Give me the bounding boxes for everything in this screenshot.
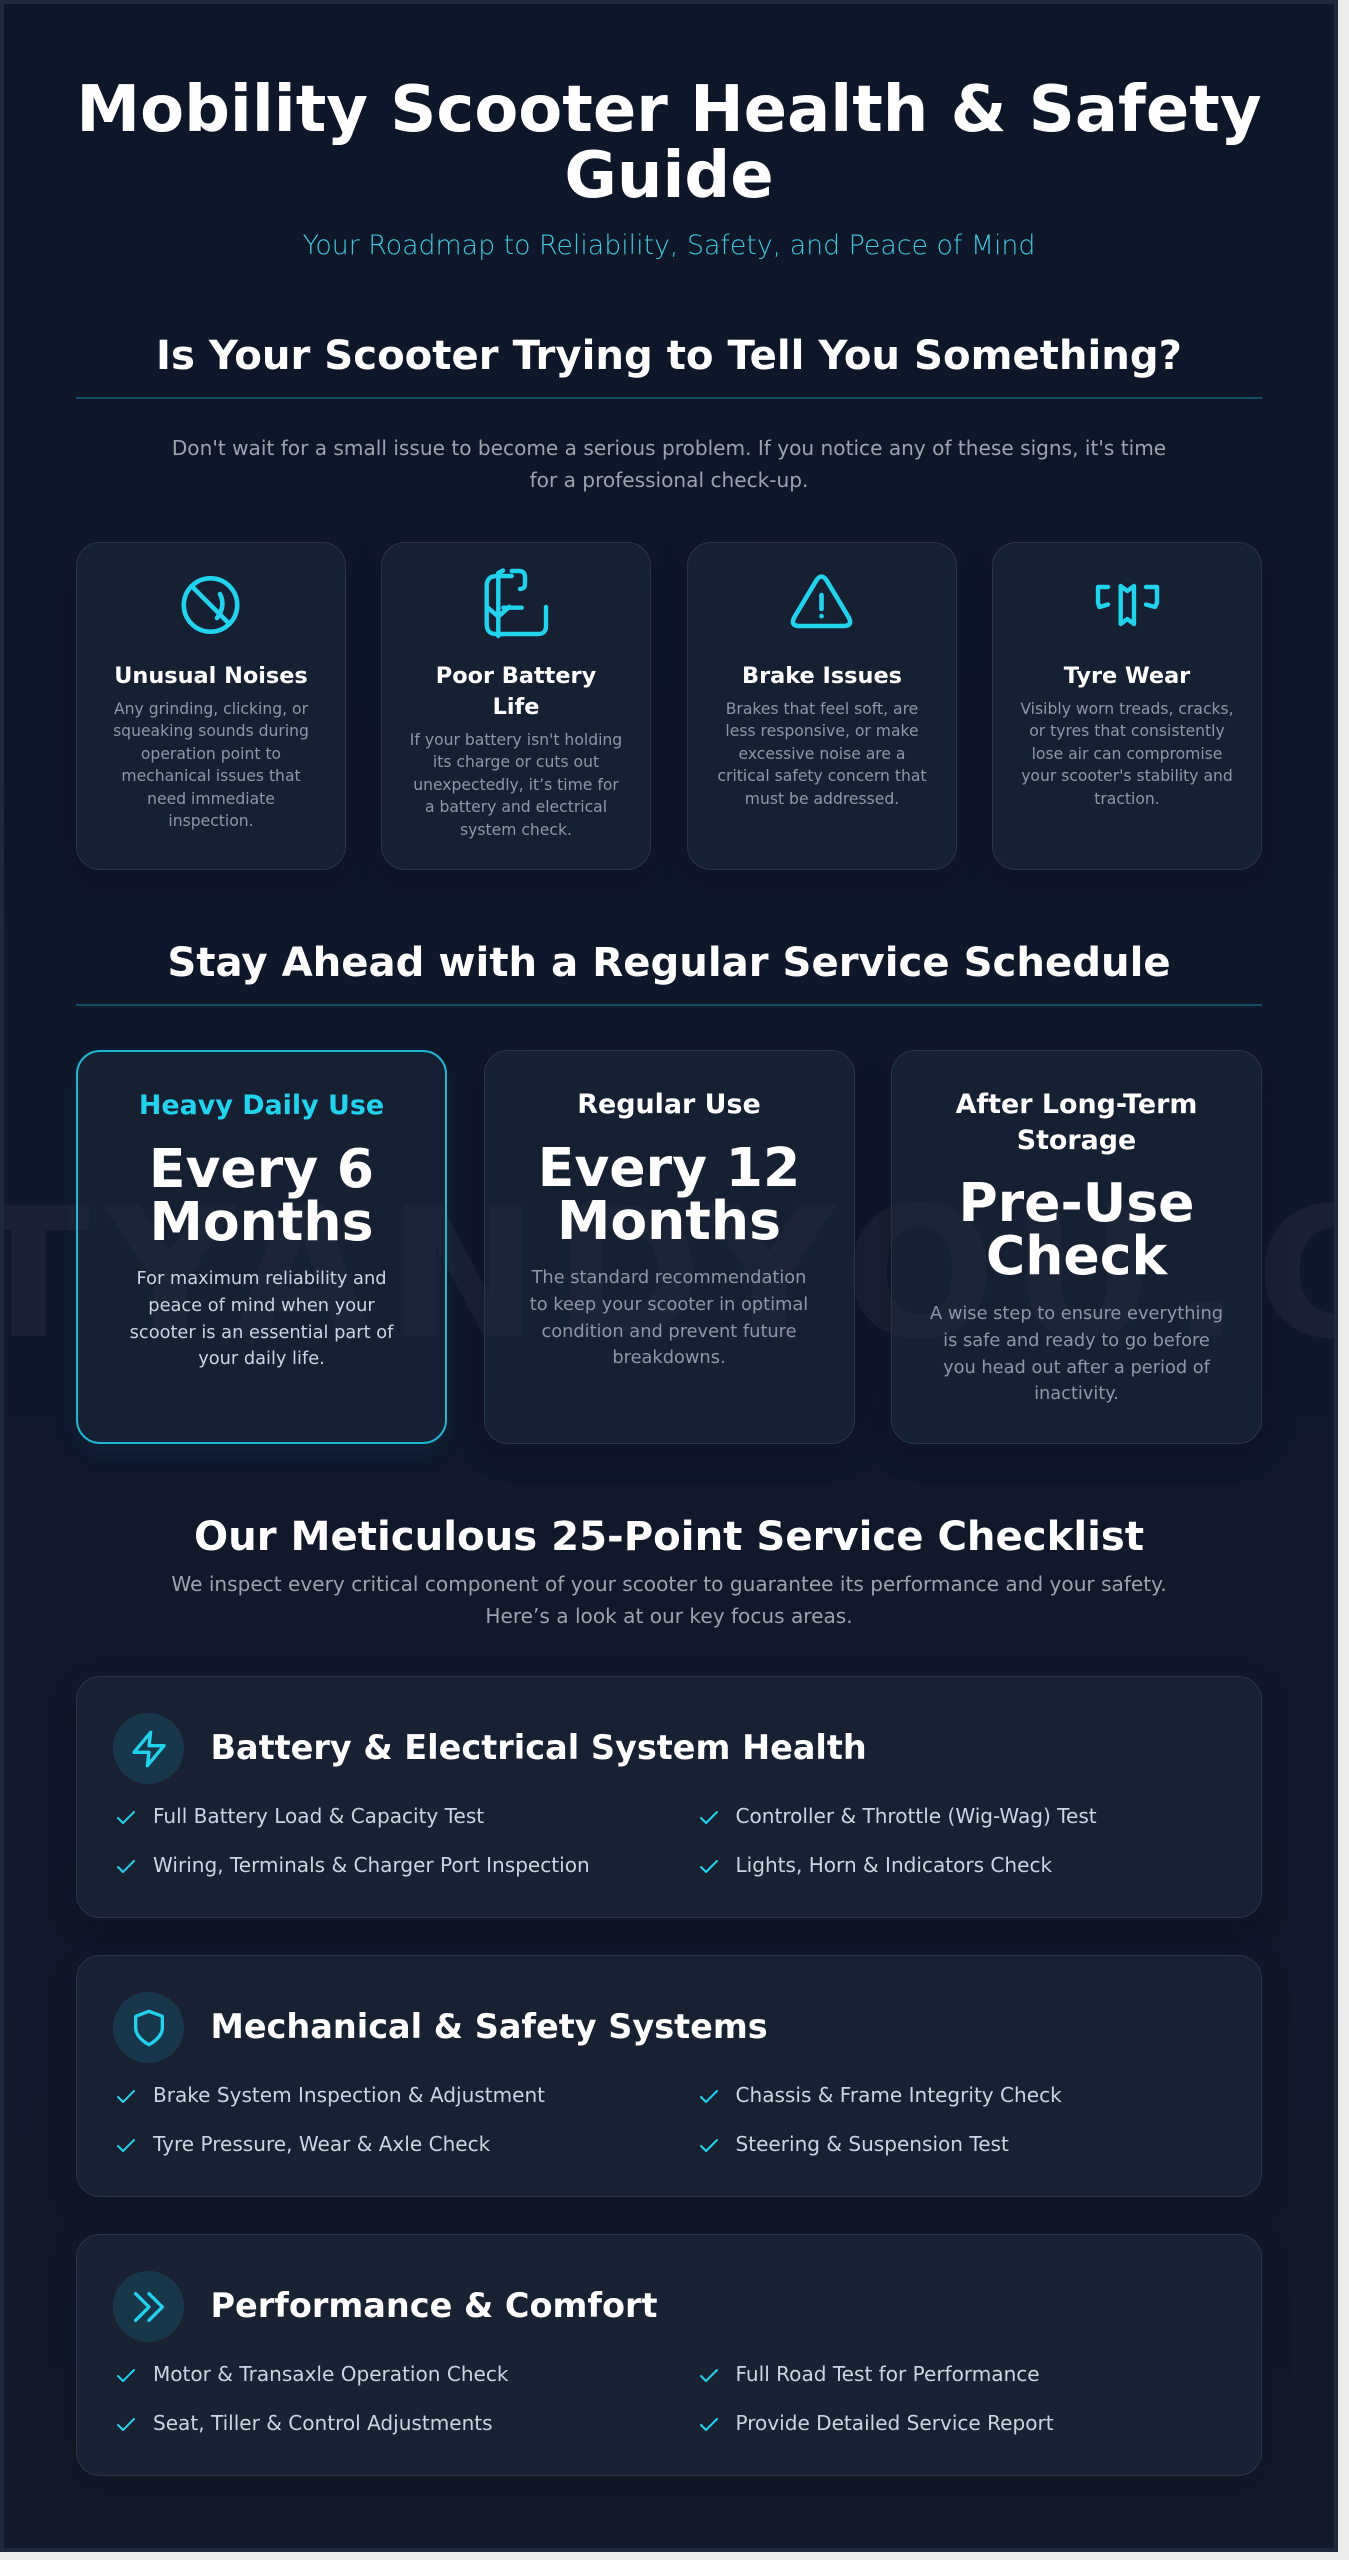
checklist items: Provide Detailed Service Report [736,2411,1054,2435]
checklist items [117,1804,1097,1877]
card description: excessive noise are a [739,745,905,763]
card description [1020,700,1234,808]
intro text: Don't wait for a small issue to become a serious problem. If you notice any of these signs, it's time [172,436,1166,460]
checklist items: Chassis & Frame Integrity Check [736,2083,1062,2107]
card title: Poor Battery [436,663,596,689]
card description [113,700,309,830]
panel: poor battery life [381,542,651,870]
subtitle: Your Roadmap to Reliability, Safety, and Peace of Mind [303,230,1035,261]
plan description: breakdowns. [612,1347,726,1368]
card description [717,700,927,808]
icon: shield [113,1992,184,2063]
card description: traction. [1094,790,1160,808]
plan description: inactivity. [1034,1383,1119,1404]
plan description: your daily life. [198,1348,325,1369]
plan label: Heavy Daily Use [139,1090,384,1121]
card description: Visibly worn treads, cracks, [1020,700,1234,718]
checklist items: Full Battery Load & Capacity Test [153,1804,484,1828]
icon: tyre [1096,584,1160,626]
plan label: After Long-Term [956,1089,1197,1120]
plan description: to keep your scooter in optimal [530,1294,808,1315]
checklist items: Lights, Horn & Indicators Check [736,1853,1052,1877]
panel: regular use [484,1050,854,1444]
card description: need immediate [147,790,275,808]
card description: Brakes that feel soft, are [726,700,918,718]
icon: no sound [182,576,240,634]
plan interval [149,1137,374,1253]
card description: system check. [460,821,572,839]
plan description: The standard recommendation [532,1267,806,1288]
checklist items [117,2362,1054,2435]
heading: warning signs: Is Your Scooter Trying to Tell You Something? [156,333,1182,379]
plan description: peace of mind when your [148,1295,375,1316]
plan description: A wise step to ensure everything [930,1303,1223,1324]
intro text [172,436,1166,492]
plan description [130,1268,394,1369]
intro text: for a professional check-up. [530,468,808,492]
card description: operation point to [141,745,281,763]
card description: unexpectedly, it’s time for [413,776,619,794]
card description: Any grinding, clicking, or [114,700,308,718]
card description: squeaking sounds during [113,722,309,740]
heading: service schedule: Stay Ahead with a Regular Service Schedule [167,940,1171,986]
title [76,73,1262,213]
card description: must be addressed. [745,790,899,808]
panel: tyre wear [992,542,1262,870]
card description: critical safety concern that [717,767,927,785]
plan interval: Months [150,1190,373,1253]
card description: If your battery isn't holding [410,731,622,749]
checklist items: Tyre Pressure, Wear & Axle Check [153,2132,490,2156]
plan description [530,1267,808,1368]
plan label: Regular Use [577,1089,761,1120]
plan description: you head out after a period of [943,1357,1210,1378]
card description: mechanical issues that [121,767,301,785]
plan interval: Check [986,1224,1167,1287]
icon: battery [484,568,548,638]
panel title: Performance & Comfort [210,2286,658,2325]
heading: checklist: Our Meticulous 25-Point Service Checklist [194,1514,1144,1560]
title: Guide [564,139,774,213]
plan description: scooter is an essential part of [130,1322,393,1343]
card description: inspection. [168,812,254,830]
checklist items [117,2083,1062,2156]
card title: Brake Issues [742,663,902,689]
panel: heavy daily use [76,1050,447,1444]
plan interval: Months [557,1189,781,1252]
checklist intro [171,1572,1167,1628]
plan description: is safe and ready to go before [943,1330,1210,1351]
panel title: Mechanical & Safety Systems [210,2007,768,2046]
panel: after long-term storage [891,1050,1262,1444]
card title: Life [493,694,539,720]
card description: lose air can compromise [1032,745,1222,763]
panel: performance and comfort [76,2234,1262,2476]
card description [410,731,622,839]
plan interval: Pre-Use [958,1171,1195,1234]
card title: Unusual Noises [114,663,308,689]
plan interval: Every 12 [538,1136,800,1199]
card description: its charge or cuts out [433,753,599,771]
panel: battery and electrical [76,1676,1262,1918]
card title: Tyre Wear [1064,663,1190,689]
checklist items: Steering & Suspension Test [736,2132,1009,2156]
plan interval [958,1171,1195,1287]
checklist items: Full Road Test for Performance [736,2362,1040,2386]
panel: mechanical and safety [76,1955,1262,2197]
card title [436,663,596,720]
title: Mobility Scooter Health & Safety [76,73,1262,147]
plan description: For maximum reliability and [136,1268,387,1289]
plan description [930,1303,1223,1404]
checklist items: Seat, Tiller & Control Adjustments [153,2411,493,2435]
card description: your scooter's stability and [1021,767,1233,785]
icon: double chevron [113,2271,184,2342]
panel: unusual noises [76,542,346,870]
icon: warning triangle [790,574,852,628]
checklist items: Wiring, Terminals & Charger Port Inspection [153,1853,590,1877]
card description: less responsive, or make [725,722,919,740]
plan interval [538,1136,800,1252]
panel: brake issues [687,542,957,870]
plan label [956,1089,1197,1156]
plan label: Storage [1017,1125,1136,1156]
checklist intro: Here’s a look at our key focus areas. [485,1604,853,1628]
card description: or tyres that consistently [1029,722,1225,740]
icon: lightning bolt [113,1713,184,1784]
panel title: Battery & Electrical System Health [210,1728,867,1767]
checklist items: Motor & Transaxle Operation Check [153,2362,509,2386]
card description: a battery and electrical [425,798,607,816]
plan description: condition and prevent future [541,1321,797,1342]
checklist intro: We inspect every critical component of your scooter to guarantee its performance and your safety. [171,1572,1167,1596]
checklist items: Brake System Inspection & Adjustment [153,2083,545,2107]
checklist items: Controller & Throttle (Wig-Wag) Test [736,1804,1097,1828]
plan interval: Every 6 [149,1137,374,1200]
